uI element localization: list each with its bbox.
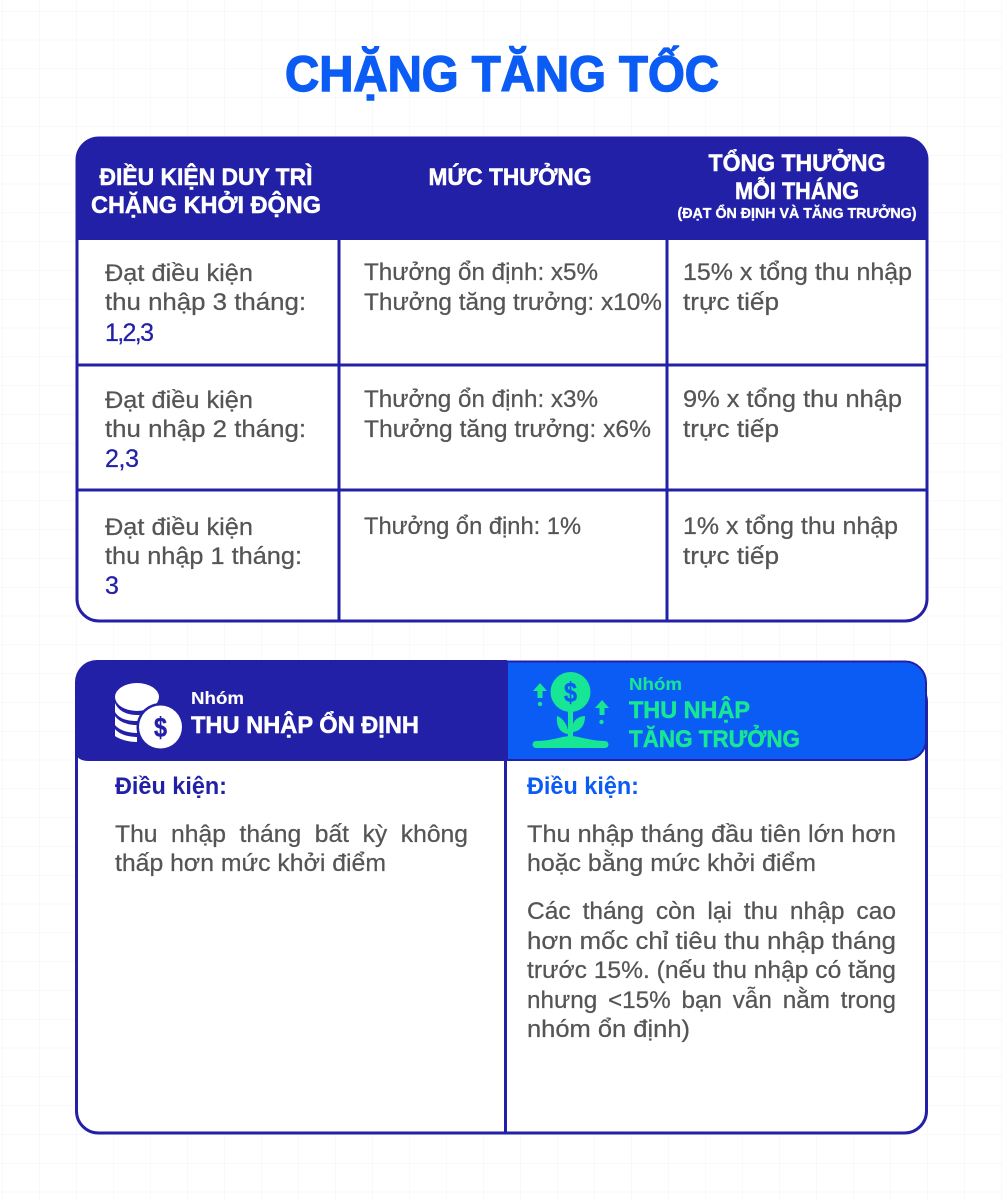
growth group conditions: [527, 773, 896, 1043]
icon: coins with dollar: $: [154, 712, 167, 743]
stable group conditions: [115, 773, 468, 877]
header: monthly total: (ĐẠT ỔN ĐỊNH VÀ TĂNG TRƯỞNG): [678, 204, 917, 222]
growth group conditions: Thu nhập tháng đầu tiên lớn hơn: [527, 821, 896, 848]
header: reward level: MỨC THƯỞNG: [428, 162, 592, 191]
row 3: Đạt điều kiện: [105, 514, 253, 541]
row 2: trực tiếp: [683, 416, 779, 443]
header: monthly total: TỔNG THƯỞNG: [708, 148, 886, 177]
row 2: thu nhập 2 tháng:: [105, 416, 306, 443]
stable group conditions: thấp hơn mức khởi điểm: [115, 850, 386, 877]
row 1: Thưởng ổn định: x5%: [364, 259, 598, 286]
row 1: trực tiếp: [683, 289, 779, 316]
growth group label: THU NHẬP: [629, 696, 750, 724]
header: conditions: [91, 163, 321, 219]
table grid lines: [77, 239, 927, 621]
growth group conditions: nhóm ổn định): [527, 1016, 690, 1043]
icon: money plant: [533, 672, 609, 748]
growth group conditions: nhưng <15% bạn vẫn nằm trong: [527, 987, 896, 1014]
row 2: Thưởng tăng trưởng: x6%: [364, 416, 651, 443]
title: CHẶNG TĂNG TỐC: [285, 45, 719, 102]
row 3: 3: [105, 572, 119, 600]
row 2: Thưởng ổn định: x3%: [364, 386, 598, 413]
row 1: 15% x tổng thu nhập: [683, 259, 912, 286]
header: conditions: CHẶNG KHỞI ĐỘNG: [91, 190, 321, 219]
header: monthly total: MỖI THÁNG: [735, 176, 859, 205]
row 2: 2,3: [105, 445, 139, 473]
growth group conditions: hoặc bằng mức khởi điểm: [527, 850, 816, 877]
header: conditions: ĐIỀU KIỆN DUY TRÌ: [100, 163, 312, 191]
row 3: thu nhập 1 tháng:: [105, 543, 302, 570]
icon: money plant: $: [564, 677, 577, 708]
column divider: [504, 755, 507, 1133]
header: stable income: [75, 660, 507, 761]
row 1: Đạt điều kiện: [105, 260, 253, 287]
row 1: [105, 259, 912, 347]
row 3: 1% x tổng thu nhập: [683, 513, 898, 540]
row 2: [105, 386, 902, 473]
row 2: 9% x tổng thu nhập: [683, 386, 902, 413]
stable group label: Nhóm: [191, 688, 244, 708]
growth group label: Nhóm: [629, 674, 682, 694]
growth group label: TĂNG TRƯỞNG: [629, 724, 800, 753]
row 1: 1,2,3: [105, 319, 154, 347]
row 3: trực tiếp: [683, 543, 779, 570]
panel: income groups: [75, 660, 926, 1133]
table header background: [76, 137, 928, 240]
icon: coins with dollar: [115, 683, 184, 751]
row 3: [105, 513, 898, 600]
panel: reward table: [76, 137, 928, 621]
growth group conditions: Các tháng còn lại thu nhập cao: [527, 898, 896, 925]
growth group conditions: trước 15%. (nếu thu nhập có tăng: [527, 957, 896, 984]
row 1: thu nhập 3 tháng:: [105, 289, 306, 316]
row 3: Thưởng ổn định: 1%: [364, 513, 581, 540]
stable group label: THU NHẬP ỔN ĐỊNH: [191, 711, 419, 739]
stable group label: [191, 688, 419, 739]
row 1: Thưởng tăng trưởng: x10%: [364, 289, 662, 316]
stable group conditions: Thu nhập tháng bất kỳ không: [115, 821, 468, 848]
header: growth income: [507, 662, 926, 760]
row 2: Đạt điều kiện: [105, 387, 253, 414]
stable group conditions: Điều kiện:: [115, 773, 227, 800]
header: monthly total: [678, 148, 917, 222]
growth group conditions: Điều kiện:: [527, 773, 639, 800]
growth group conditions: hơn mốc chỉ tiêu thu nhập tháng: [527, 928, 896, 955]
growth group label: [629, 674, 800, 753]
